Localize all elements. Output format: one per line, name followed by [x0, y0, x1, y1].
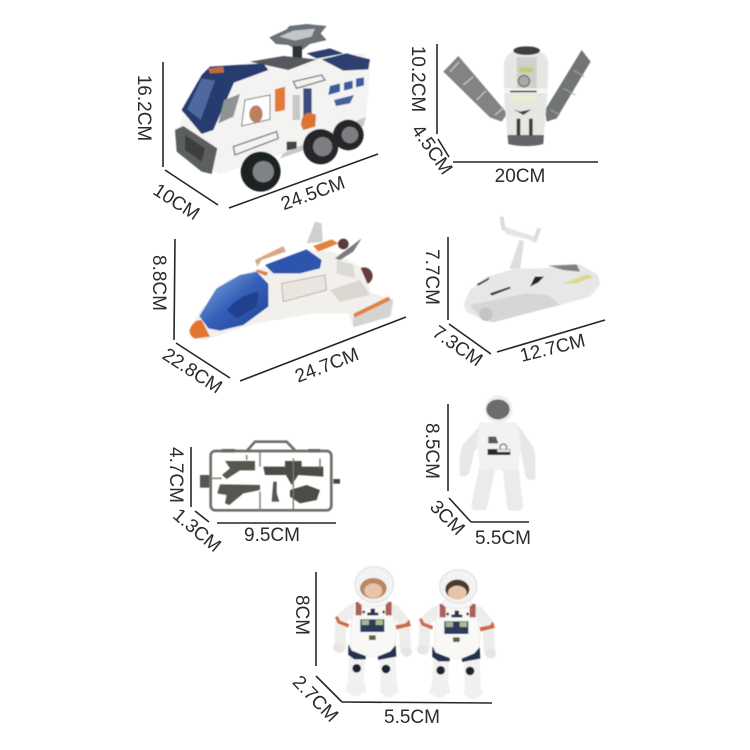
dimension line: depth: [165, 170, 218, 205]
dimension line: height: [447, 237, 449, 320]
dimension line: length: [497, 320, 605, 352]
dimension line: depth: [176, 343, 230, 378]
weapon sprue toy: [200, 442, 340, 510]
label: 8CM: 8CM: [291, 595, 312, 635]
label: 5.5CM: 5.5CM: [475, 528, 531, 549]
panel: boat vehicle: [421, 217, 605, 371]
label: 10CM: 10CM: [149, 180, 203, 225]
label: 12.7CM: 12.7CM: [518, 330, 587, 367]
label: 1.3CM: 1.3CM: [168, 505, 225, 557]
label: 16.2CM: 16.2CM: [133, 75, 154, 141]
dimension line: depth: [316, 676, 342, 702]
boat vehicle toy: [463, 217, 600, 322]
label: 7.7CM: 7.7CM: [421, 249, 442, 305]
dimension line: length: [453, 161, 598, 163]
panel: weapon sprue: [165, 442, 340, 557]
label: 22.8CM: 22.8CM: [158, 344, 226, 398]
panel: truck: [133, 24, 378, 225]
label: 24.7CM: 24.7CM: [292, 344, 362, 388]
dimension line: length: [240, 317, 406, 381]
label: 2.7CM: 2.7CM: [288, 672, 342, 727]
panel: astronaut: [421, 395, 532, 549]
label: 9.5CM: 9.5CM: [244, 525, 300, 546]
dimension line: height: [162, 62, 164, 167]
label: 3CM: 3CM: [425, 496, 469, 540]
label: 5.5CM: 5.5CM: [384, 707, 440, 728]
label: 4.7CM: 4.7CM: [165, 447, 186, 503]
dimension line: height: [174, 239, 175, 340]
dimension line: length: [229, 154, 378, 208]
label: 7.3CM: 7.3CM: [428, 322, 486, 371]
dimension line: length: [217, 522, 336, 524]
dimension line: depth: [449, 324, 491, 354]
dimension line: depth: [449, 498, 471, 522]
panel: satellite: [407, 44, 598, 187]
figure: female astronaut: [333, 567, 412, 693]
dimension line: height: [447, 404, 449, 491]
dimension line: height: [315, 572, 317, 666]
panel: shuttle: [148, 222, 406, 398]
label: 10.2CM: 10.2CM: [407, 46, 428, 112]
dimension line: height: [436, 44, 438, 134]
astronaut toy: [463, 395, 532, 505]
dimension line: depth: [438, 139, 449, 157]
label: 8.8CM: 8.8CM: [148, 255, 169, 311]
satellite toy: [443, 46, 591, 146]
dimension line: length: [342, 702, 492, 703]
label: 20CM: 20CM: [495, 166, 545, 187]
panel: crew figures: [288, 567, 496, 728]
dimension line: depth: [195, 511, 209, 522]
label: 24.5CM: 24.5CM: [278, 173, 348, 215]
truck toy: [175, 24, 371, 192]
figure: male astronaut: [417, 570, 496, 695]
shuttle toy: [189, 222, 393, 339]
dimension line: length: [471, 521, 529, 523]
label: 4.5CM: 4.5CM: [407, 121, 456, 179]
dimension line: height: [190, 447, 192, 507]
label: 8.5CM: 8.5CM: [421, 423, 442, 479]
